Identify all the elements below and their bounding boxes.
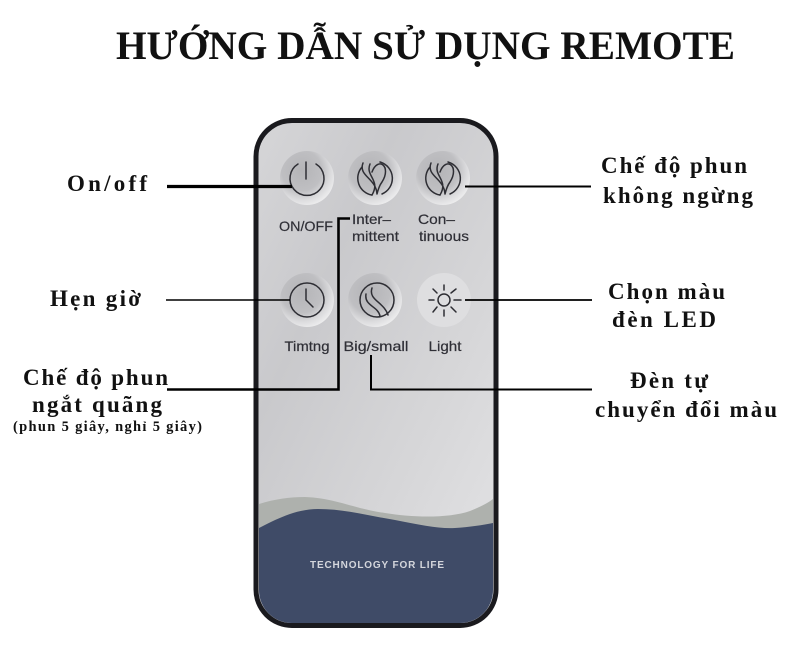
label: intermittent spray: ngắt quãng (32, 392, 162, 417)
button labels (279, 211, 469, 354)
label: intermittent spray: Chế độ phun (23, 365, 168, 390)
label: intermittent spray (13, 365, 202, 435)
button labels: Big/small (344, 338, 408, 354)
label: choose LED colour: đèn LED (612, 307, 716, 332)
button: big/small (348, 273, 402, 327)
label: continuous spray: Chế độ phun (601, 153, 747, 178)
leader line: timer (166, 299, 290, 301)
label: intermittent spray: (phun 5 giây, nghỉ 5 giây) (13, 419, 202, 435)
remote body (256, 120, 496, 626)
button labels: tinuous (419, 228, 469, 244)
label: continuous spray (601, 153, 754, 208)
label: continuous spray: không ngừng (603, 183, 754, 208)
remote control (256, 120, 496, 626)
label: on/off: On/off (67, 171, 147, 196)
button labels: ON/OFF (279, 218, 333, 234)
leader line: intermittent (167, 218, 350, 390)
title: HƯỚNG DẪN SỬ DỤNG REMOTE (116, 22, 735, 68)
button labels: mittent (352, 228, 399, 244)
label: auto colour change (595, 368, 777, 422)
button labels: Timtng (284, 338, 330, 354)
button: continuous (416, 151, 470, 205)
leader line: auto colour change (371, 355, 592, 390)
label: choose LED colour (608, 279, 725, 332)
dark footer panel (259, 509, 493, 625)
button labels: Inter– (352, 211, 391, 227)
button labels: Con– (418, 211, 455, 227)
button: intermittent (348, 151, 402, 205)
leader line: LED colour (465, 299, 592, 301)
button: light (417, 273, 471, 327)
label: auto colour change: chuyển đổi màu (595, 397, 777, 422)
brand text: TECHNOLOGY FOR LIFE (310, 560, 444, 571)
wave band (259, 497, 493, 530)
leader line: on/off (167, 185, 292, 188)
button: timing (280, 273, 334, 327)
button labels: Light (428, 338, 462, 354)
label: choose LED colour: Chọn màu (608, 279, 725, 304)
label: auto colour change: Đèn tự (630, 368, 709, 393)
button: on/off (280, 151, 334, 205)
label: timer: Hẹn giờ (50, 286, 141, 311)
leader line: continuous (465, 186, 591, 188)
